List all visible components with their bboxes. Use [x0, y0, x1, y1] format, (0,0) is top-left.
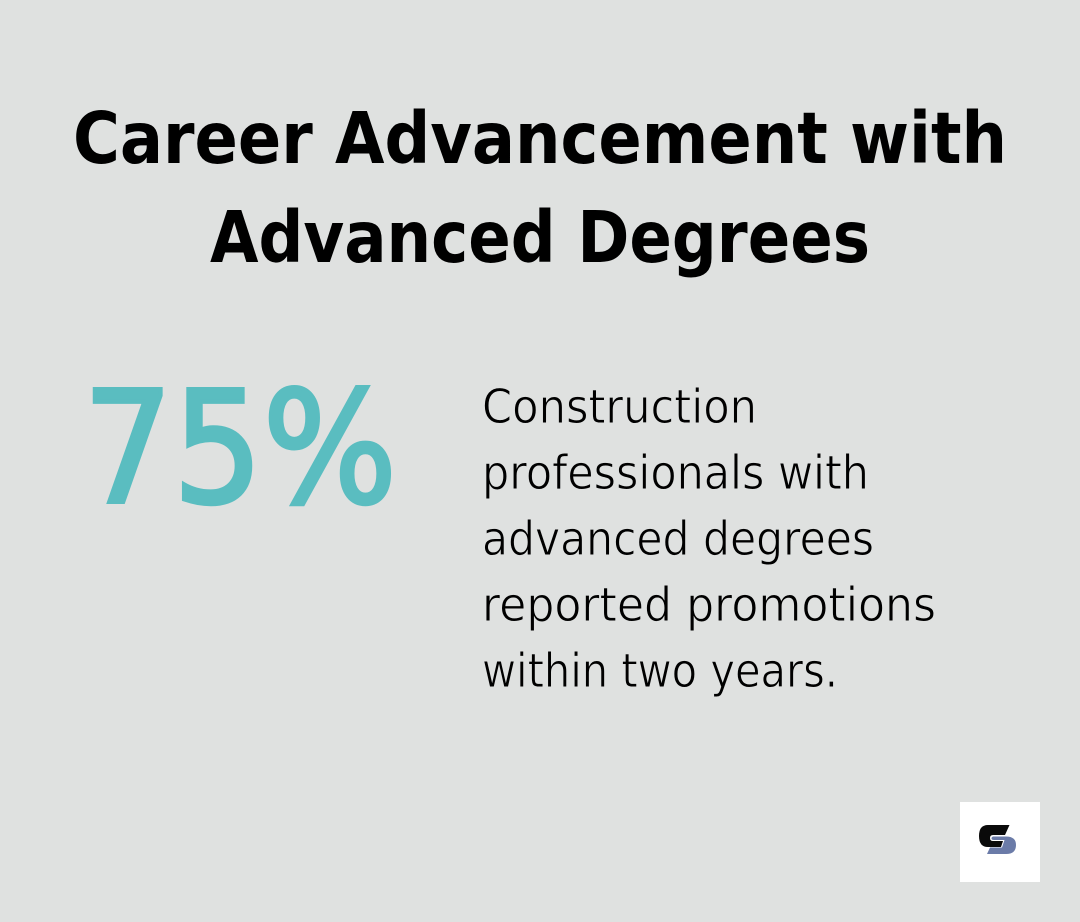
description text: professionals with [482, 446, 869, 501]
description text: Construction [482, 380, 757, 435]
description text: advanced degrees [482, 512, 874, 567]
description text: reported promotions [482, 578, 936, 633]
description text: within two years. [482, 644, 838, 699]
logo badge [960, 802, 1040, 882]
title [73, 97, 1007, 279]
description text [482, 380, 936, 699]
statistic: 75%: 75% [83, 358, 397, 539]
title: Career Advancement with [73, 97, 1007, 180]
title: Advanced Degrees [210, 196, 870, 279]
